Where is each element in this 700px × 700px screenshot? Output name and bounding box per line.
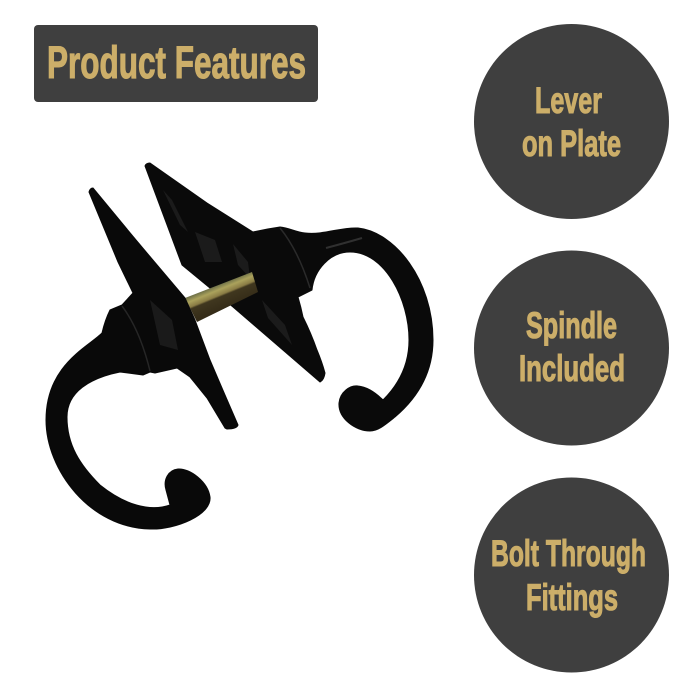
feature badge: lever on plate [474, 24, 669, 219]
spindle [185, 272, 258, 322]
right rosette highlight [280, 228, 310, 288]
feature badge: bolt through fittings [474, 478, 669, 672]
left plate and lever [46, 188, 238, 529]
feature badge: spindle included [474, 250, 669, 446]
photo: black lever handles on plates with spindle [46, 163, 433, 529]
heading text: Product Features [47, 37, 306, 88]
left rosette highlight [122, 306, 150, 371]
heading banner [34, 25, 318, 102]
feature badge: lever on plate: on Plate [522, 123, 621, 164]
right plate and lever [145, 163, 433, 431]
left plate sheen [150, 300, 178, 350]
feature badge: lever on plate: Lever [535, 80, 602, 121]
feature badge: spindle included: Included [519, 348, 625, 389]
feature badge: bolt through fittings: Fittings [526, 577, 618, 618]
right lever sheen [326, 238, 362, 248]
feature badge: spindle included: Spindle [526, 305, 617, 346]
right plate surface details [163, 190, 292, 345]
